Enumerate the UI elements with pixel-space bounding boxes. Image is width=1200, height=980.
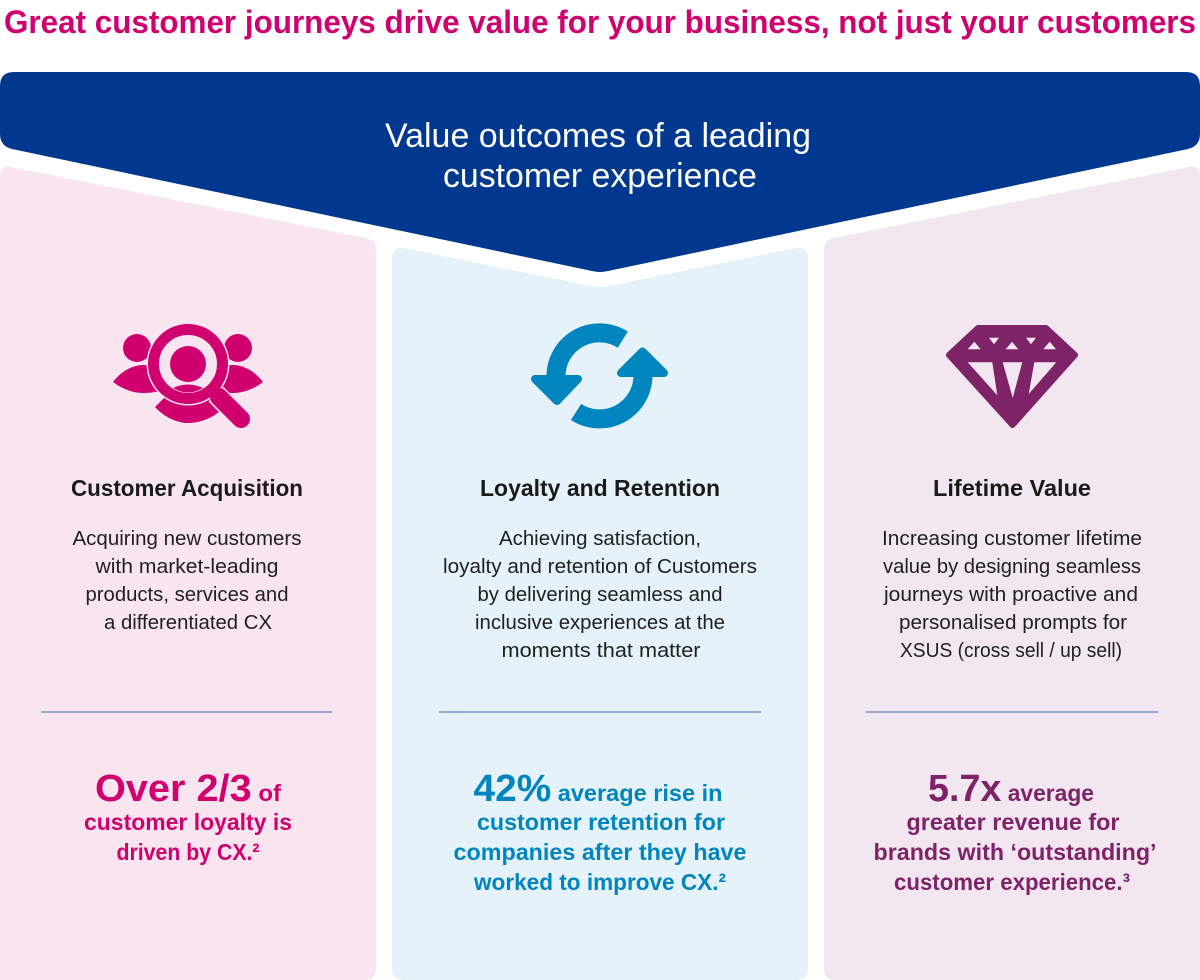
- text: loyalty description: by delivering seamless and: [478, 584, 722, 606]
- stat: 5.7x: customer experience.³: [894, 869, 1130, 895]
- stat: 5.7x: [874, 768, 1156, 895]
- text: lifetime description: journeys with proactive and: [883, 584, 1138, 606]
- panel: loyalty and retention: [392, 248, 808, 980]
- stat: 42 percent: [454, 768, 746, 895]
- banner heading: Value outcomes of a leading: [385, 117, 811, 155]
- banner heading: [385, 117, 811, 195]
- stat: 5.7x: greater revenue for: [906, 809, 1120, 835]
- stat: over two thirds: customer loyalty is: [84, 809, 292, 835]
- text: loyalty description: inclusive experiences at the: [475, 612, 725, 634]
- text: acquisition description: a differentiated CX: [104, 612, 272, 634]
- text: lifetime description: personalised prompts for: [899, 612, 1127, 634]
- stat: 5.7x: 5.7x average: [928, 768, 1094, 810]
- stat: 5.7x: brands with ‘outstanding’: [874, 839, 1156, 865]
- text: lifetime description: [882, 528, 1142, 662]
- stat: 42 percent: customer retention for: [477, 809, 725, 835]
- stat: 42 percent: worked to improve CX.²: [473, 869, 726, 895]
- banner: value outcomes: [0, 72, 1200, 272]
- stat: 42 percent: 42% average rise in: [474, 768, 723, 810]
- text: loyalty description: [443, 528, 757, 662]
- heading: loyalty and retention: Loyalty and Retention: [480, 475, 720, 501]
- heading: customer acquisition: Customer Acquisition: [71, 475, 303, 501]
- stat: 42 percent: companies after they have: [454, 839, 746, 865]
- stat: over two thirds: [84, 768, 292, 865]
- text: lifetime description: Increasing customer lifetime: [882, 528, 1142, 550]
- icon: circular arrows: [535, 333, 664, 419]
- title: Great customer journeys drive value for your business, not just your customers: [4, 4, 1196, 40]
- text: loyalty description: loyalty and retention of Customers: [443, 556, 757, 578]
- text: acquisition description: with market-leading: [94, 556, 279, 578]
- text: lifetime description: value by designing seamless: [883, 556, 1141, 578]
- panel: lifetime value: [824, 167, 1200, 980]
- stat: over two thirds: Over 2/3 of: [95, 768, 281, 810]
- banner heading: customer experience: [443, 157, 757, 195]
- stat: over two thirds: driven by CX.²: [116, 839, 260, 865]
- text: acquisition description: Acquiring new customers: [72, 528, 302, 550]
- panel: customer acquisition: [0, 167, 376, 980]
- text: lifetime description: XSUS (cross sell / up sell): [900, 640, 1122, 662]
- icon: diamond: [949, 328, 1075, 425]
- text: loyalty description: Achieving satisfaction,: [499, 528, 701, 550]
- icon: people under magnifying glass: [113, 322, 263, 423]
- heading: lifetime value: Lifetime Value: [933, 475, 1091, 501]
- text: acquisition description: products, services and: [86, 584, 288, 606]
- text: loyalty description: moments that matter: [502, 640, 701, 662]
- text: acquisition description: [72, 528, 302, 634]
